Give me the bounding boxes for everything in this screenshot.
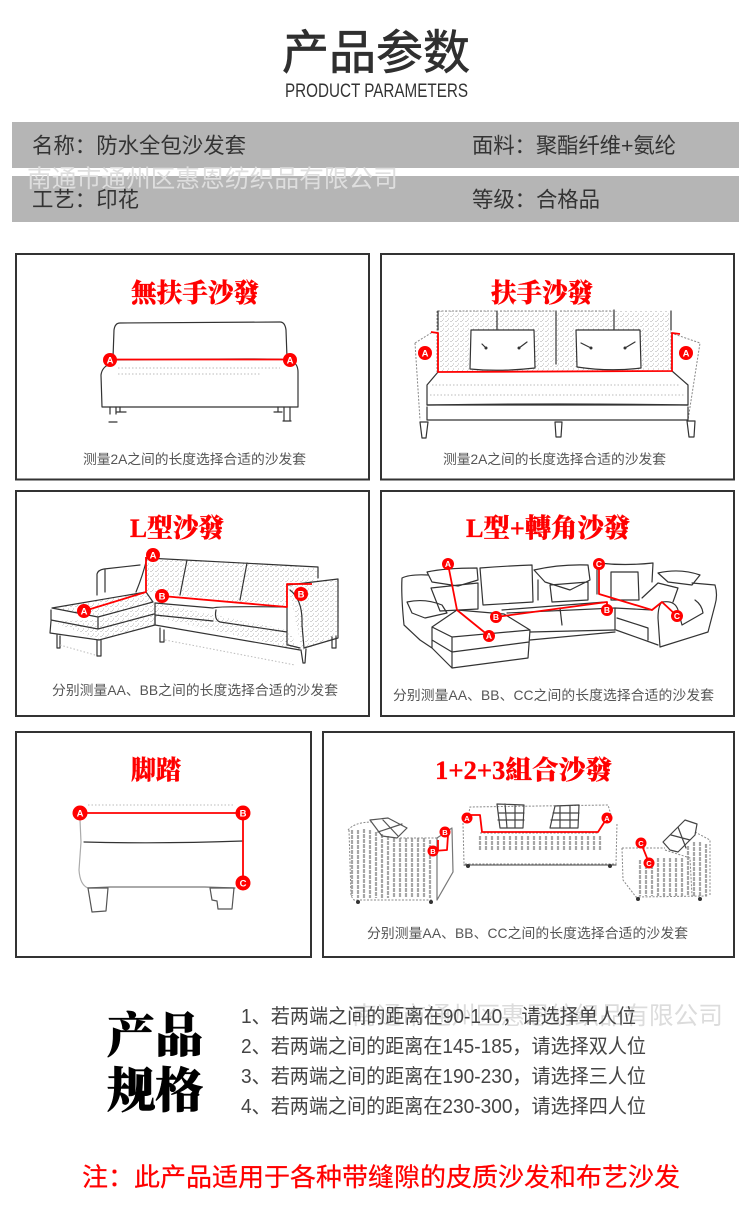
measure lines AA BB: A: [150, 550, 157, 562]
panel: sofa with arms: [381, 254, 734, 480]
measure lines AA BB: A: [81, 606, 88, 618]
spec list: 2、若两端之间的距离在145-185，请选择双人位: [241, 1035, 646, 1058]
subtitle: PRODUCT PARAMETERS: [285, 81, 468, 102]
measure lines AA BB: [77, 548, 312, 618]
section: product specification: [107, 1002, 723, 1118]
panel: L plus corner sofa: [381, 491, 734, 716]
spec list: 3、若两端之间的距离在190-230，请选择三人位: [241, 1065, 646, 1088]
armchair right: C: [638, 839, 644, 848]
caption: 测量2A之间的长度选择合适的沙发套: [443, 452, 666, 467]
note: 注：此产品适用于各种带缝隙的皮质沙发和布艺沙发: [82, 1164, 680, 1192]
heading: specification: [107, 1010, 203, 1118]
title: 产品参数: [282, 26, 470, 79]
panel: parameters: 南通市通州区惠恩纺织品有限公司: [27, 165, 398, 193]
measure lines AA BB: B: [159, 592, 166, 602]
spec list: [241, 1005, 646, 1118]
panel: parameters: 面料：聚酯纤维+氨纶: [472, 134, 676, 158]
panel: L-shaped sofa: [16, 491, 369, 716]
sofa drawing: corner: [402, 563, 716, 668]
caption: 分别测量AA、BB、CC之间的长度选择合适的沙发套: [367, 926, 688, 941]
measure lines AA BB CC: C: [596, 559, 602, 569]
measure line A-A: [103, 353, 297, 367]
armchair right: [622, 820, 710, 901]
measure lines A B C: B: [240, 808, 247, 820]
sofa drawing: arms: [415, 310, 700, 438]
caption: 分别测量AA、BB之间的长度选择合适的沙发套: [52, 683, 338, 698]
measure lines AA BB CC: A: [486, 631, 492, 641]
panel: 1+2+3 set: [323, 732, 734, 957]
footstool drawing: [79, 805, 243, 912]
measure line A-A: A: [287, 356, 294, 366]
measure lines AA BB CC: A: [445, 559, 451, 569]
heading: specification: 产品: [107, 1010, 203, 1063]
measure lines AA BB CC: B: [493, 612, 499, 622]
heading: footstool: 脚踏: [131, 756, 181, 785]
measure lines A B C: [72, 806, 250, 890]
measure lines AA BB CC: C: [674, 611, 680, 621]
heading: no-arm sofa: 無扶手沙發: [131, 278, 259, 308]
spec list: 1、若两端之间的距离在90-140，请选择单人位: [241, 1005, 636, 1028]
panel: parameters: 工艺：印花: [32, 188, 139, 212]
spec list: 4、若两端之间的距离在230-300，请选择四人位: [241, 1095, 646, 1118]
measure lines A B C: A: [77, 808, 84, 820]
heading: L plus corner: L型+轉角沙發: [466, 513, 630, 543]
armchair left: B: [442, 828, 448, 837]
three-seat sofa center: A: [604, 814, 610, 823]
panel: parameters: 名称：防水全包沙发套: [32, 134, 246, 158]
measure line A-A: A: [683, 348, 690, 360]
measure lines AA BB: B: [298, 590, 305, 600]
caption: 测量2A之间的长度选择合适的沙发套: [83, 452, 306, 467]
measure line A-A: A: [107, 356, 114, 366]
watermark: 南通市通州区惠恩纺织品有限公司: [352, 1002, 723, 1030]
panel: parameters: [12, 122, 739, 222]
armchair right: C: [646, 859, 652, 868]
measure lines A B C: C: [240, 878, 247, 890]
panel: parameters: 等级：合格品: [472, 188, 600, 212]
three-seat sofa center: [462, 804, 617, 868]
sofa drawing: L: [50, 558, 338, 665]
panel: footstool: [16, 732, 311, 957]
heading: 1+2+3: 1+2+3組合沙發: [435, 755, 612, 785]
armchair left: B: [430, 847, 436, 856]
heading: L sofa: L型沙發: [130, 513, 224, 543]
three-seat sofa center: A: [464, 814, 470, 823]
caption: 分别测量AA、BB、CC之间的长度选择合适的沙发套: [393, 688, 714, 703]
measure line A-A: [418, 332, 693, 372]
heading: specification: 规格: [107, 1065, 203, 1118]
measure lines AA BB CC: B: [604, 605, 610, 615]
heading: arm sofa: 扶手沙發: [491, 278, 593, 308]
armchair left: [348, 818, 453, 904]
measure lines AA BB CC: [442, 558, 683, 642]
measure line A-A: A: [422, 348, 429, 360]
sofa drawing: no arms: [101, 322, 298, 422]
panel: sofa without arms: [16, 254, 369, 480]
